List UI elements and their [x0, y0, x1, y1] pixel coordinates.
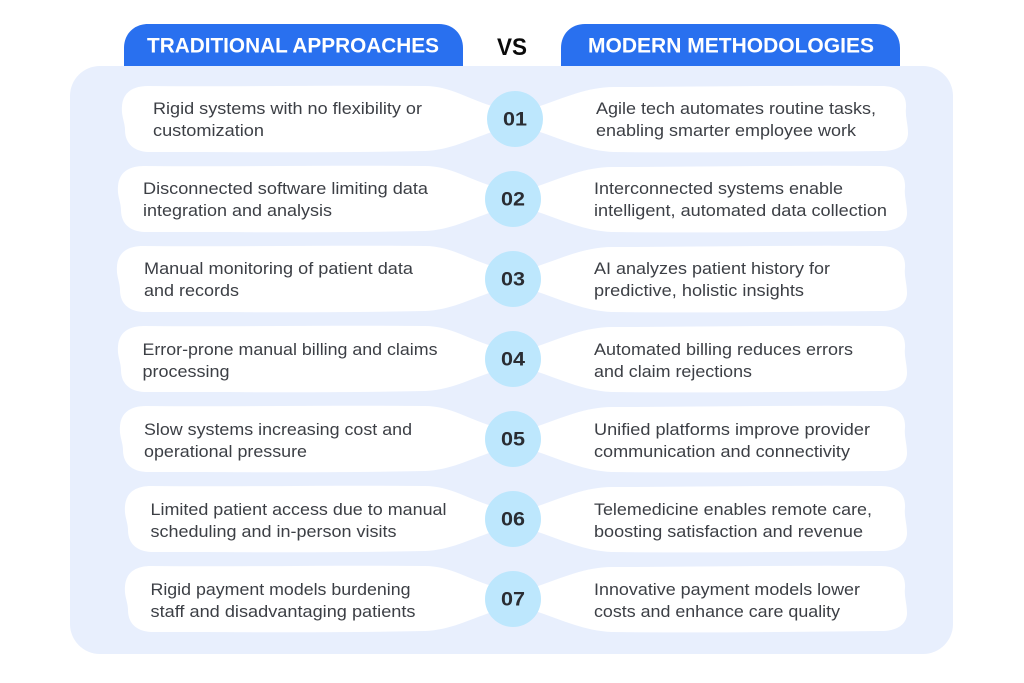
number badge 06 [485, 491, 541, 547]
right text 02: intelligent, automated data collection [594, 201, 887, 220]
number badge 07 [485, 571, 541, 627]
right blob 02 [538, 166, 907, 232]
right text 01: enabling smarter employee work [596, 121, 857, 140]
number badge 05: 05 [501, 430, 525, 450]
number badge 05 [485, 411, 541, 467]
number badge 01: 01 [503, 110, 527, 130]
panel: comparison background [70, 66, 953, 654]
header: traditional approaches: TRADITIONAL APPROACHES [147, 34, 439, 58]
header: modern methodologies: MODERN METHODOLOGIES [588, 34, 874, 58]
number badge 02 [485, 171, 541, 227]
right blob 07 [538, 566, 907, 632]
left blob 05 [120, 406, 492, 472]
row 03 [117, 246, 907, 312]
number badge 04 [485, 331, 541, 387]
number badge 03: 03 [501, 270, 525, 290]
number badge 01 [487, 91, 543, 147]
right text 04: and claim rejections [594, 362, 752, 381]
right text 07: costs and enhance care quality [594, 602, 841, 621]
left text 05: operational pressure [144, 442, 307, 461]
right blob 05 [538, 406, 907, 472]
left blob 01 [122, 86, 492, 152]
left text 04: Error-prone manual billing and claims [142, 340, 438, 359]
number badge 07: 07 [501, 590, 525, 610]
left blob 02 [118, 166, 492, 232]
right text 03: AI analyzes patient history for [594, 259, 830, 278]
right text 03: predictive, holistic insights [594, 281, 804, 300]
row 05 [120, 406, 907, 472]
row 07 [125, 566, 907, 632]
right blob 06 [538, 486, 907, 552]
number badge 03 [485, 251, 541, 307]
left text 01: Rigid systems with no flexibility or [153, 99, 422, 118]
left text 05: Slow systems increasing cost and [144, 420, 412, 439]
left text 04: processing [142, 362, 230, 381]
right text 02: Interconnected systems enable [594, 179, 843, 198]
left text 03: and records [144, 281, 239, 300]
right text 01: Agile tech automates routine tasks, [596, 99, 876, 118]
left text 01: customization [153, 121, 264, 140]
left text 06: Limited patient access due to manual [150, 500, 446, 519]
number badge 04: 04 [501, 350, 525, 370]
right text 07: Innovative payment models lower [594, 580, 860, 599]
right text 06: boosting satisfaction and revenue [594, 522, 863, 541]
header: traditional approaches [124, 24, 463, 66]
row 04 [118, 326, 907, 392]
row 01 [122, 86, 908, 152]
right blob 01 [540, 86, 908, 152]
left blob 06 [125, 486, 492, 552]
left text 07: Rigid payment models burdening [150, 580, 410, 599]
right text 05: Unified platforms improve provider [594, 420, 870, 439]
left blob 07 [125, 566, 492, 632]
right text 06: Telemedicine enables remote care, [594, 500, 872, 519]
header: modern methodologies [561, 24, 900, 66]
right blob 04 [538, 326, 907, 392]
vs label: VS [497, 34, 527, 61]
left text 07: staff and disadvantaging patients [150, 602, 416, 621]
left text 02: integration and analysis [143, 201, 332, 220]
left blob 04 [118, 326, 492, 392]
row 02 [118, 166, 907, 232]
number badge 02: 02 [501, 190, 525, 210]
row 06 [125, 486, 907, 552]
right blob 03 [538, 246, 907, 312]
left text 03: Manual monitoring of patient data [144, 259, 414, 278]
number badge 06: 06 [501, 510, 525, 530]
right text 04: Automated billing reduces errors [594, 340, 853, 359]
left text 02: Disconnected software limiting data [143, 179, 429, 198]
left blob 03 [117, 246, 492, 312]
right text 05: communication and connectivity [594, 442, 851, 461]
left text 06: scheduling and in-person visits [150, 522, 396, 541]
